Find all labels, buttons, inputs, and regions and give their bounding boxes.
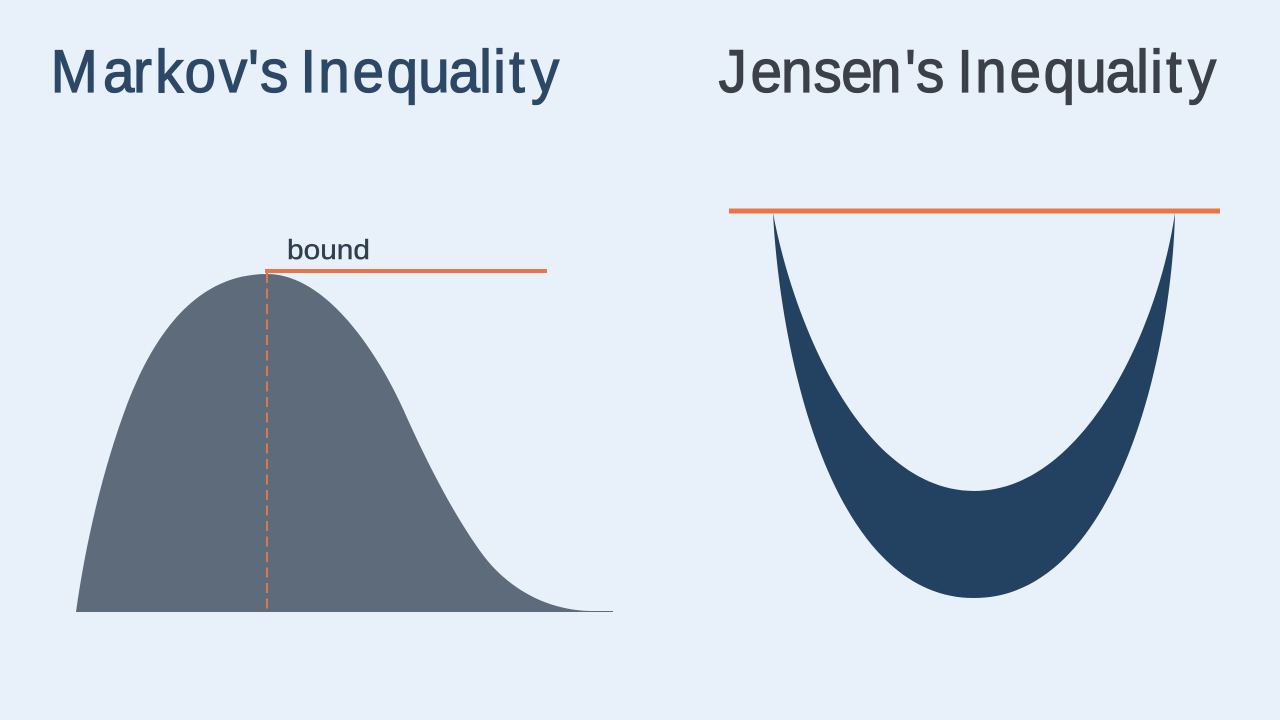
top tangent line	[729, 208, 1220, 214]
label: bound: bound	[287, 234, 370, 265]
title: Jensen's Inequality: Jensen's Inequality	[719, 38, 1216, 105]
bound line	[265, 269, 547, 273]
panel: Markov chart	[76, 234, 613, 612]
title: Markov's Inequality: Markov's Inequality	[51, 38, 559, 105]
grey distribution curve	[76, 274, 613, 612]
panel: Jensen chart	[729, 211, 1220, 598]
dashed vertical line	[266, 273, 268, 612]
crescent shape	[773, 213, 1175, 598]
